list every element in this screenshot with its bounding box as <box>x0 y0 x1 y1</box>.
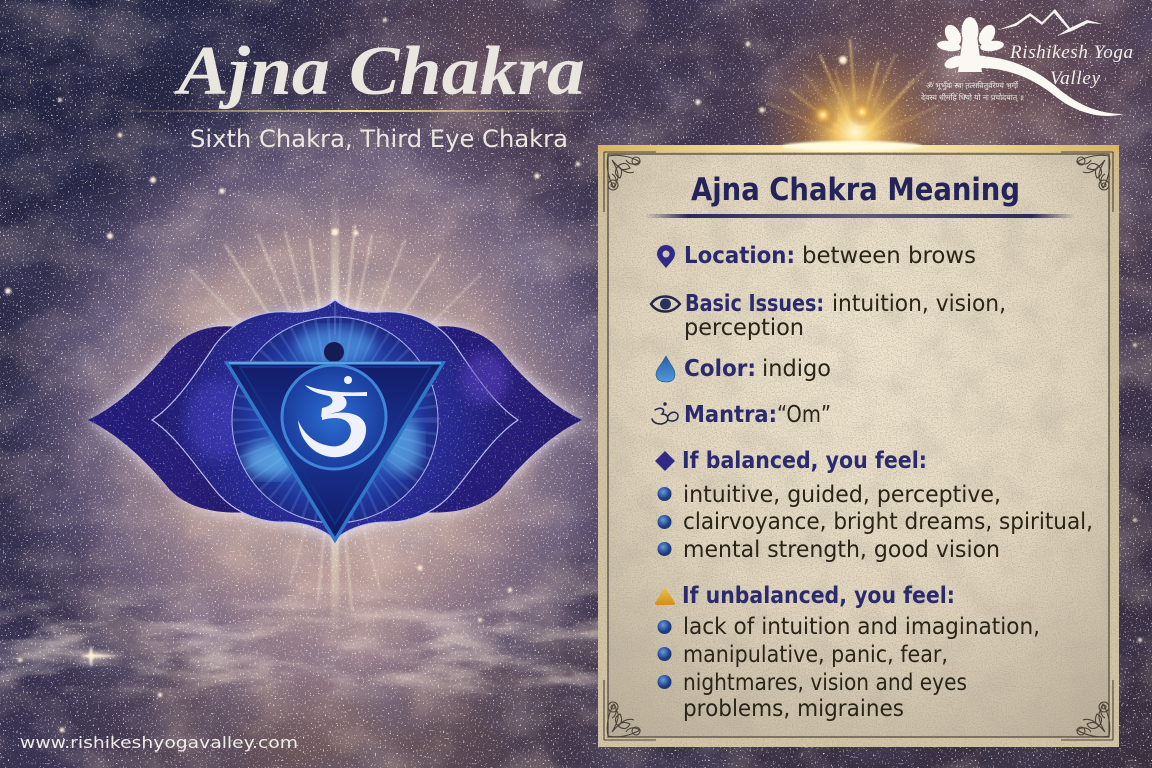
heading rule <box>645 214 1075 218</box>
top tip line <box>334 302 336 335</box>
icon: om <box>652 403 678 424</box>
subtitle: Sixth Chakra, Third Eye Chakra <box>190 125 568 153</box>
unbalanced item 3 second line: problems, migraines <box>683 696 904 722</box>
corner ornament bottom left <box>604 680 656 740</box>
unbalanced item 3: nightmares, vision and eyes <box>683 670 967 696</box>
eye disc light patches <box>244 327 422 478</box>
row: basic issues <box>651 291 1006 341</box>
section: unbalanced <box>655 583 1040 722</box>
corner ornament top right <box>1061 152 1113 212</box>
light rays behind chakra <box>190 190 480 640</box>
mantra text: Mantra: <box>684 402 777 428</box>
chakra halo <box>88 296 582 544</box>
icon: diamond <box>655 451 675 471</box>
unbalanced item 2: manipulative, panic, fear, <box>683 642 948 668</box>
balanced item 2: clairvoyance, bright dreams, spiritual, <box>683 509 1093 535</box>
bindu <box>324 342 344 362</box>
logo swoosh <box>980 56 1124 116</box>
icon: eye <box>651 296 680 312</box>
central eye disc <box>232 317 438 523</box>
logo mountains <box>998 9 1103 36</box>
purple nebula patches <box>185 352 509 460</box>
inner petals <box>152 300 518 540</box>
om symbol <box>298 376 367 457</box>
color text: Color: <box>684 356 756 382</box>
outer petal left <box>88 326 250 513</box>
logo mantra: देवस्य धीमहि धियो यो नः प्रचोदयात् ॥ <box>921 93 1024 102</box>
golden glow above panel <box>750 27 960 237</box>
parchment panel <box>598 141 1119 747</box>
color text: indigo <box>762 356 831 382</box>
panel top band <box>598 145 1119 152</box>
bullet <box>658 647 672 661</box>
logo lotus flower <box>936 17 1005 72</box>
triangle inner line <box>240 367 430 524</box>
corner ornament bottom right <box>1061 680 1113 740</box>
bullet <box>658 515 672 529</box>
logo name: Rishikesh Yoga <box>1009 42 1133 63</box>
bullet <box>658 542 672 556</box>
triangle <box>227 363 443 540</box>
bullet <box>658 487 672 501</box>
panel paper <box>608 154 1109 737</box>
balanced item 1: intuitive, guided, perceptive, <box>683 482 1001 508</box>
title: Ajna Chakra <box>174 33 585 110</box>
bullet <box>658 675 672 689</box>
panel heading: Ajna Chakra Meaning <box>691 172 1020 208</box>
row: mantra <box>652 402 831 428</box>
mantra text: “Om” <box>777 402 831 428</box>
row: color <box>656 356 831 382</box>
balanced heading: If balanced, you feel: <box>682 448 927 474</box>
logo: Rishikesh Yoga Valley <box>921 9 1133 116</box>
corner ornament top left <box>604 152 656 212</box>
unbalanced item 1: lack of intuition and imagination, <box>683 614 1040 640</box>
logo mantra: ॐ भूर्भुवः स्वः तत्सवितुर्वरेण्यं भर्गो <box>926 81 1019 91</box>
location text: between brows <box>802 243 976 269</box>
bullet <box>658 620 672 634</box>
website url: www.rishikeshyogavalley.com <box>20 733 298 752</box>
balanced item 3: mental strength, good vision <box>683 537 1000 563</box>
outer petal right <box>420 326 582 513</box>
om disc <box>282 365 386 469</box>
chakra symbol <box>88 296 582 544</box>
logo mantra <box>921 81 1024 102</box>
unbalanced heading: If unbalanced, you feel: <box>682 583 955 609</box>
panel frame <box>598 147 1119 747</box>
location text: Location: <box>684 243 795 269</box>
basic issues text: intuition, vision, <box>832 291 1006 317</box>
basic issues second line: perception <box>684 315 804 341</box>
petal star field <box>88 300 582 540</box>
logo name second line: Valley <box>1050 68 1101 89</box>
basic issues text: Basic Issues: <box>685 291 824 317</box>
title divider <box>110 110 620 112</box>
icon: warning triangle <box>655 587 675 605</box>
panel inner border <box>608 154 1109 737</box>
triangle top highlight <box>229 362 441 364</box>
panel top glow <box>782 141 922 151</box>
icon: map pin <box>657 245 675 268</box>
icon: water drop <box>656 356 675 382</box>
section: balanced <box>655 448 1093 563</box>
row: location <box>657 243 976 269</box>
